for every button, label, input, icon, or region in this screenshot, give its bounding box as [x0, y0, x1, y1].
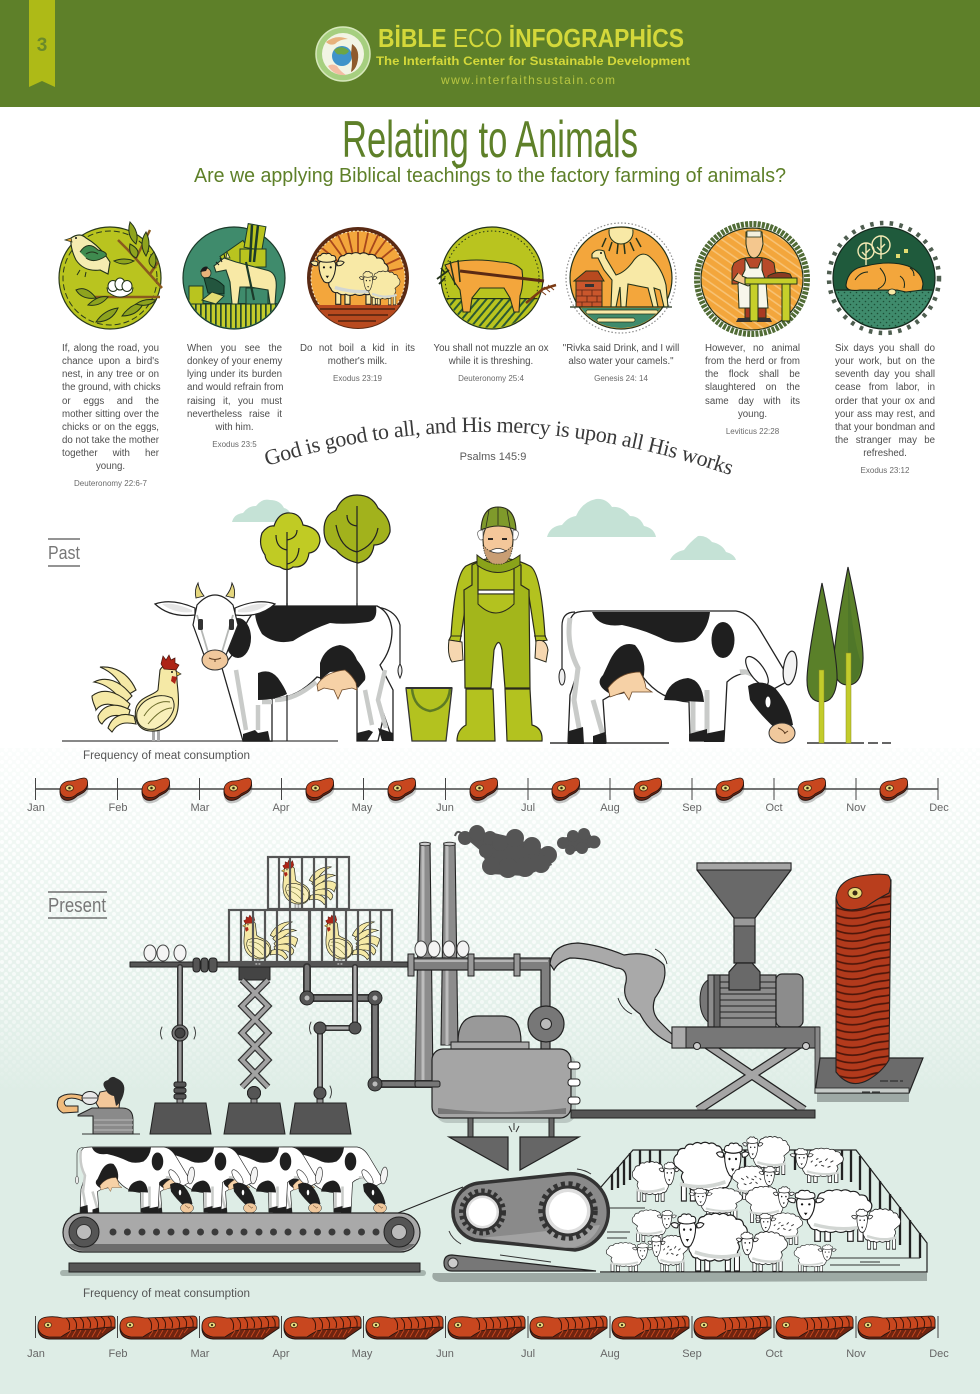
text block: Deuteronomy 22:6-7: If, along the road, you [62, 343, 159, 354]
text block: Exodus 23:5: nevertheless raise it [187, 409, 282, 420]
text block: Deuteronomy 22:6-7: Deuteronomy 22:6-7 [74, 479, 147, 488]
farmer [448, 507, 548, 741]
text block: Deuteronomy 22:6-7 [62, 343, 161, 488]
curved verse: God is good to all, and His mercy is upon all His works [265, 417, 732, 474]
text block: Genesis 24:14 [563, 343, 679, 383]
chart label: frequency present: Frequency of meat consumption [83, 1288, 250, 1300]
text block: Leviticus 22:28 [705, 343, 800, 436]
tank assembly [408, 954, 580, 1138]
timeline: present meat consumption: Aug [600, 1348, 620, 1360]
tagline: The Interfaith Center for Sustainable Development [376, 54, 690, 68]
text block: Deuteronomy 25:4 [434, 343, 548, 383]
timeline: present meat consumption: Feb [109, 1348, 127, 1360]
timeline: past meat consumption: Oct [765, 802, 783, 814]
medallion: sheep and lamb [307, 227, 409, 329]
text block: Exodus 23:12: the stranger may be [835, 435, 935, 446]
header band [0, 0, 980, 107]
text block: Genesis 24:14: also water your camels." [568, 356, 674, 367]
text block: Deuteronomy 22:6-7: mother sitting over the [62, 409, 159, 420]
text block: Exodus 23:12 [835, 343, 935, 475]
timeline: present meat consumption: Sep [682, 1348, 702, 1360]
timeline: past meat consumption: Jun [436, 802, 454, 814]
text block: Leviticus 22:28: same day with its [705, 396, 800, 406]
text block: Exodus 23:5: Exodus 23:5 [212, 440, 257, 449]
text block: Deuteronomy 22:6-7: nest, in any tree or on [62, 369, 159, 380]
cow facing left (past) [155, 583, 402, 741]
gears and belt [449, 1169, 608, 1250]
timeline: present meat consumption: Mar [191, 1348, 210, 1360]
medallion: ox and plough [437, 227, 556, 331]
text block: Deuteronomy 22:6-7: the ground, with chicks [62, 382, 161, 393]
text block: Exodus 23:12: order that your ox and [835, 396, 935, 406]
text block: Genesis 24:14: Genesis 24: 14 [594, 374, 648, 383]
dispensing funnels [449, 1123, 579, 1170]
hose [550, 943, 674, 1044]
timeline: present meat consumption: Jan [27, 1348, 45, 1360]
timeline: present meat consumption: Oct [765, 1348, 783, 1360]
page number ribbon: 3 [37, 35, 47, 56]
timeline: past meat consumption: May [352, 802, 373, 814]
man eating burger [57, 1077, 140, 1134]
chimneys [415, 842, 458, 1081]
medallion: ox resting [829, 223, 939, 333]
scissor lift [242, 980, 268, 1100]
timeline: present meat consumption: May [352, 1348, 373, 1360]
bucket [406, 688, 452, 741]
chart label: frequency past: Frequency of meat consumption [83, 750, 250, 762]
conveyor with cows [60, 1147, 463, 1276]
caged chickens [229, 857, 392, 965]
text block: Exodus 23:5 [187, 343, 283, 449]
slide ramp [444, 1255, 596, 1271]
text block: Exodus 23:5: donkey of your enemy [187, 356, 282, 367]
timeline: past meat consumption: Jul [521, 802, 535, 814]
organisation name: BİBLE ECO İNFOGRAPHİCS [378, 23, 684, 53]
text block: Deuteronomy 25:4: Deuteronomy 25:4 [458, 374, 524, 383]
website: www.interfaithsustain.com [440, 73, 615, 87]
timeline: past meat consumption: Nov [846, 802, 866, 814]
text block: Exodus 23:19: Do not boil a kid in its [300, 343, 415, 354]
machine pipes and shelf [130, 958, 441, 1103]
text block: Exodus 23:12: Exodus 23:12 [861, 466, 909, 475]
title: Relating to Animals [342, 111, 638, 169]
medallion: butcher at table [697, 224, 807, 334]
text block: Exodus 23:12: that your bondman and [835, 422, 935, 433]
tree: round dark [324, 495, 390, 606]
text block: Leviticus 22:28: Leviticus 22:28 [726, 427, 779, 436]
text block: Leviticus 22:28: the flock shall be [705, 369, 800, 380]
text block: Deuteronomy 22:6-7: or eggs and the [62, 396, 159, 406]
past scene: ground lines [62, 741, 891, 743]
timeline: past meat consumption: Mar [191, 802, 210, 814]
page number ribbon [29, 0, 55, 87]
cow grazing right (past) [559, 611, 799, 744]
text block: Leviticus 22:28: from the herd or from [705, 356, 800, 367]
timeline: past meat consumption: Jan [27, 802, 45, 814]
verse reference: Psalms 145:9 [460, 451, 526, 463]
sheep pen fence [432, 1150, 927, 1282]
text block: Deuteronomy 22:6-7: chicks or on the eggs, [62, 422, 159, 433]
timeline: present meat consumption [27, 1316, 949, 1360]
rooster (past) [92, 655, 181, 741]
text block: Exodus 23:12: seventh day you shall [835, 369, 935, 380]
section label: Present: Present [48, 895, 106, 917]
tree: round light [261, 513, 320, 606]
logo [316, 27, 370, 81]
timeline: present meat consumption: Jul [521, 1348, 535, 1360]
section label: Past: Past [48, 543, 80, 563]
machine bases [150, 1099, 351, 1134]
smoke [455, 825, 600, 878]
text block: Exodus 23:19: mother's milk. [328, 356, 387, 367]
text block: Exodus 23:5: raising it, you must [187, 396, 282, 406]
text block: Leviticus 22:28: slaughtered on the [705, 382, 800, 393]
cypress trees [807, 567, 863, 743]
timeline: past meat consumption: Dec [929, 802, 949, 814]
text block: Exodus 23:12: your ass may rest, and [835, 409, 935, 420]
meat stack [836, 874, 891, 1084]
timeline: past meat consumption: Aug [600, 802, 620, 814]
timeline: past meat consumption: Sep [682, 802, 702, 814]
eggs on shelf [144, 941, 469, 961]
tray [815, 1058, 923, 1102]
text block: Deuteronomy 22:6-7: do not take the mother [62, 435, 159, 446]
text block: Deuteronomy 22:6-7: chance upon a bird's [62, 356, 159, 367]
timeline: present meat consumption: Apr [272, 1348, 290, 1360]
timeline: present meat consumption: Nov [846, 1348, 866, 1360]
timeline: past meat consumption: Apr [272, 802, 290, 814]
text block: Exodus 23:12: Six days you shall do [835, 343, 935, 354]
timeline: present meat consumption: Dec [929, 1348, 949, 1360]
text block: Exodus 23:5: and would refrain from [187, 382, 283, 393]
text block: Exodus 23:19: Exodus 23:19 [333, 374, 382, 383]
timeline: past meat consumption: Feb [109, 802, 127, 814]
text block: Exodus 23:19 [300, 343, 415, 383]
page background: halftone fade into pale green [0, 748, 980, 1394]
text block: Exodus 23:12: refreshed. [863, 448, 907, 459]
text block: Exodus 23:5: lying under its burden [187, 369, 282, 380]
past scene: clouds [232, 499, 736, 560]
section label: Past [48, 539, 80, 566]
sheep flock [606, 1136, 901, 1272]
timeline: present meat consumption: Jun [436, 1348, 454, 1360]
text block: Deuteronomy 22:6-7: young. [96, 461, 125, 472]
text block: Deuteronomy 22:6-7: together with her [62, 448, 159, 459]
text block: Leviticus 22:28: However, no animal [705, 343, 800, 354]
text block: Deuteronomy 25:4: You shall not muzzle an ox [434, 343, 548, 354]
grinder and platform [571, 863, 820, 1118]
text block: Exodus 23:12: cease from labor, in [835, 382, 935, 393]
timeline: past meat consumption [27, 778, 949, 814]
medallion: bird and nest [59, 222, 162, 329]
text block: Exodus 23:12: your work, but on the [835, 356, 935, 367]
text block: Exodus 23:5: with him. [215, 422, 254, 433]
medallion: camel at the well [566, 220, 676, 333]
text block: Deuteronomy 25:4: while it is threshing. [449, 356, 533, 367]
text block: Exodus 23:5: When you see the [187, 343, 282, 354]
medallion: donkey under burden [183, 224, 285, 330]
text block: Genesis 24:14: "Rivka said Drink, and I will [563, 343, 679, 354]
text block: Leviticus 22:28: young. [738, 409, 767, 420]
subtitle: Are we applying Biblical teachings to the factory farming of animals? [194, 165, 786, 187]
